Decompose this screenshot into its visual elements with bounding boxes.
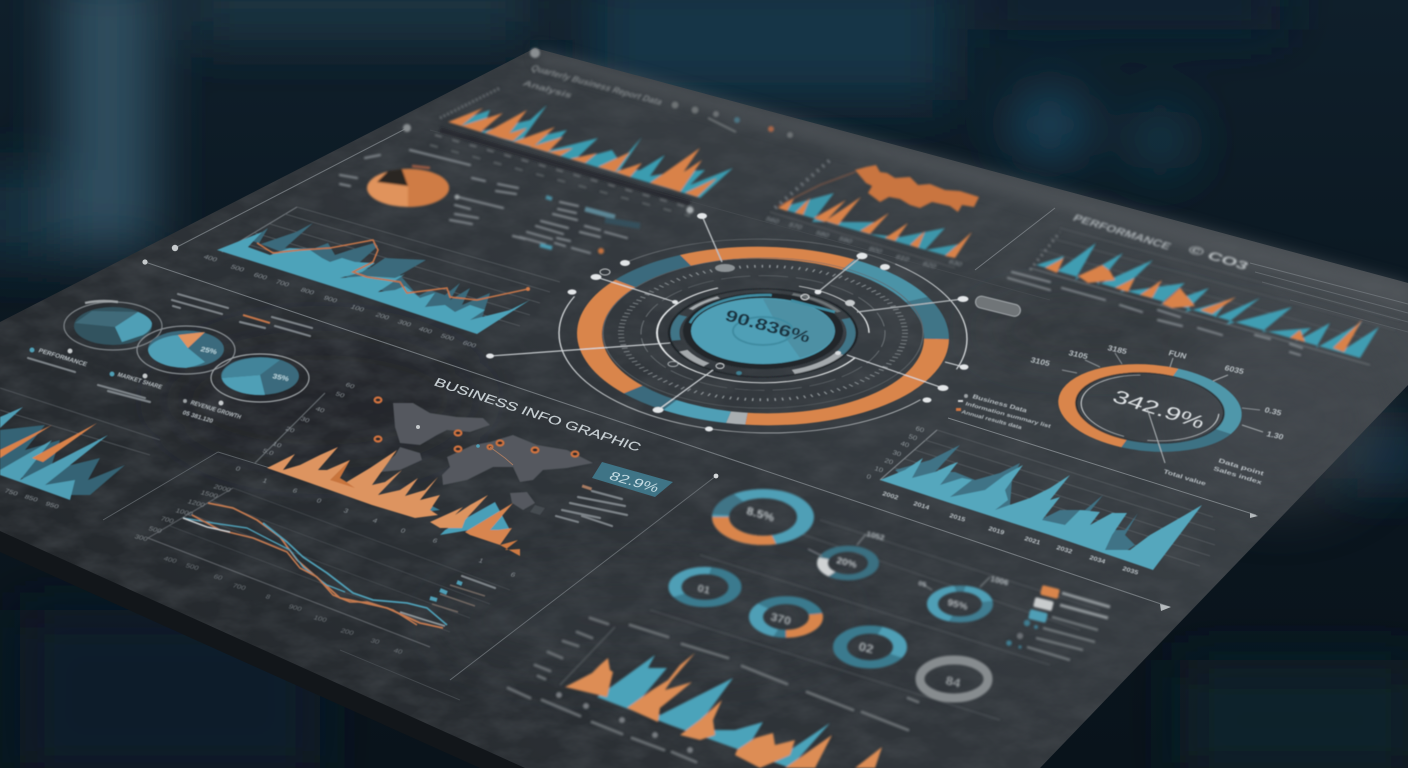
- area chart: orange: 10: [271, 441, 283, 449]
- area chart: right teal: 60: [914, 425, 925, 434]
- heading: top right chart: © CO3: [1185, 243, 1252, 272]
- pie legends: MARKET SHARE: [116, 372, 163, 391]
- panel header text: Quarterly Business Report Data: [528, 64, 664, 107]
- legend: bottom right: [1006, 585, 1110, 660]
- area chart: right teal: 2034: [1088, 555, 1106, 565]
- area chart: orange: 1: [261, 477, 269, 485]
- callouts: [1029, 344, 1285, 487]
- area chart: right teal: 2014: [912, 501, 930, 511]
- pill label: [974, 295, 1022, 318]
- legend: center right: [956, 394, 1052, 431]
- line chart: bottom left: 1000: [174, 507, 194, 518]
- pie 3: [211, 354, 309, 402]
- area chart: orange: 5.0: [261, 448, 275, 457]
- bar chart: far left: [0, 388, 165, 510]
- area chart: left with orange line: 400: [417, 326, 434, 335]
- donut 01: [675, 570, 735, 604]
- area chart: orange: 6: [509, 571, 517, 579]
- central radial gauge: [486, 213, 1022, 436]
- callouts: 3185: [1106, 344, 1129, 356]
- area chart: orange: 20: [284, 426, 296, 434]
- labels: left of pie: [340, 150, 470, 186]
- bar chart: top right with orange blob: 570: [787, 222, 804, 231]
- bar chart: top right with orange blob: 580: [814, 230, 831, 239]
- line chart: bottom left: 1500: [199, 489, 219, 500]
- line chart: bottom left: 500: [184, 562, 200, 572]
- legend: center right: Annual results data: [960, 410, 1023, 431]
- area chart: orange: 0: [315, 497, 323, 505]
- panel header text: Analysis: [520, 79, 574, 100]
- heading: top right chart: PERFORMANCE: [1070, 213, 1173, 252]
- ring: [1063, 362, 1237, 454]
- area chart: left with orange line: 700: [274, 279, 291, 288]
- area chart: left with orange line: 200: [374, 312, 391, 321]
- bar chart: top right with orange blob: 620: [921, 261, 938, 270]
- callouts: Total value: [1162, 469, 1207, 487]
- donut 01: 01: [696, 583, 711, 597]
- pie 2: [137, 326, 235, 374]
- callouts: 6035: [1223, 364, 1246, 376]
- area chart: left with orange line: [202, 207, 560, 349]
- bar chart: top right with orange blob: [764, 160, 979, 270]
- line chart: bottom left: 200: [339, 627, 355, 637]
- area chart: right teal: 20: [883, 457, 894, 466]
- area chart: right teal: 50: [907, 433, 918, 442]
- area chart: orange: 1: [477, 557, 485, 565]
- line chart: bottom left: 500: [147, 525, 163, 535]
- callouts: 0.35: [1263, 406, 1283, 417]
- connector lines and nodes: [486, 213, 968, 432]
- outer thin arcs: [557, 236, 969, 436]
- bar chart: bottom foreground: [508, 618, 918, 768]
- line chart: bottom left: 700: [231, 582, 247, 592]
- pie chart: orange: [367, 169, 449, 207]
- area chart: left with orange line: 900: [322, 295, 339, 304]
- centre disc: [683, 293, 843, 369]
- area chart: right teal: 30: [891, 449, 902, 458]
- area chart: right teal: 0: [865, 473, 872, 481]
- donut 370: [756, 600, 816, 634]
- donut 02: [840, 630, 900, 664]
- area chart: left with orange line: 600: [461, 340, 478, 349]
- area chart: orange: 6: [431, 537, 439, 545]
- area chart: orange: 3: [342, 507, 350, 515]
- kpi box: 82.9%: [606, 470, 662, 496]
- perspective divider lines: [103, 128, 1408, 700]
- pie 3: 35%: [271, 372, 291, 383]
- area chart: orange: [234, 382, 520, 579]
- area bars: top right: [1008, 228, 1400, 365]
- bar chart: far left: 950: [44, 501, 60, 510]
- donut 95%: 05: [918, 580, 927, 589]
- line chart: bottom left: 300: [133, 533, 149, 543]
- area chart: right teal: 2021: [1023, 536, 1041, 546]
- area chart: orange: 4: [371, 517, 379, 525]
- area chart: orange: 60: [344, 382, 356, 390]
- area chart: left with orange line: 400: [202, 254, 219, 263]
- notes above pies: [172, 294, 312, 336]
- area chart: orange: 0: [234, 465, 242, 473]
- inner rings and ticks: [603, 258, 923, 408]
- donut 95%: [918, 575, 1010, 619]
- heading: business infographic: BUSINESS INFO GRAPHIC: [431, 376, 643, 455]
- segmented ring: [588, 250, 938, 422]
- line chart: bottom left: 40: [392, 647, 404, 656]
- gauge value: 90.836%: [723, 306, 814, 346]
- text lists: center top: [450, 178, 640, 254]
- donut 8.5%: 8.5%: [745, 505, 776, 525]
- bar chart: top right with orange blob: 610: [894, 254, 911, 263]
- pie legends: PERFORMANCE: [37, 348, 88, 368]
- legend: center right: Business Data: [971, 394, 1028, 414]
- area chart: orange: 50: [334, 391, 346, 399]
- line chart: bottom left: [133, 483, 510, 656]
- line chart: bottom left: 900: [287, 603, 303, 613]
- donut 20%: 20%: [835, 556, 858, 571]
- donut 84: 84: [944, 673, 962, 690]
- area chart: right teal: 2032: [1055, 545, 1073, 555]
- bar chart: top right with orange blob: 630: [947, 259, 964, 268]
- callouts: Sales index: [1212, 466, 1263, 486]
- line chart: bottom left: 700: [159, 515, 175, 525]
- far section: top charts: [340, 48, 1400, 365]
- donut 84: [920, 660, 988, 698]
- panel header text: [403, 48, 793, 138]
- value: 342.9%: [1109, 387, 1209, 433]
- area chart: left with orange line: 100: [349, 304, 366, 313]
- callouts: 3105: [1029, 356, 1052, 368]
- area chart: left with orange line: 300: [396, 319, 413, 328]
- line chart: bottom left: 8: [264, 593, 272, 601]
- donut 8.5%: [720, 494, 806, 540]
- area chart: left with orange line: 600: [252, 272, 269, 281]
- kpi text block: [556, 485, 627, 526]
- donut 95%: 1006: [990, 575, 1010, 587]
- area chart: right teal: 10: [873, 465, 884, 474]
- bar chart: top right with orange blob: 600: [867, 246, 884, 255]
- area chart: orange: 0: [399, 527, 407, 535]
- donut 02: 02: [857, 639, 875, 656]
- area chart: right teal: 2019: [987, 526, 1005, 536]
- kpi box: [592, 462, 673, 497]
- panel: three pies: [28, 294, 312, 425]
- pie 2: 25%: [199, 345, 219, 356]
- area chart: right teal: 2035: [1121, 566, 1139, 576]
- area chart: left with orange line: 800: [299, 287, 316, 296]
- pie legends: [28, 348, 242, 425]
- area chart: right teal: [865, 425, 1215, 576]
- big gauge: right: [1029, 344, 1285, 487]
- bar chart: top right with orange blob: 590: [837, 236, 854, 245]
- area chart: right teal: 2015: [948, 513, 966, 523]
- callouts: 1.30: [1265, 430, 1285, 441]
- board side edge: [0, 525, 525, 768]
- bar chart: top right with orange blob: 560: [764, 216, 781, 225]
- line chart: bottom left: 100: [312, 614, 328, 624]
- callouts: FUN: [1167, 349, 1188, 361]
- area chart: right teal: 40: [899, 440, 910, 449]
- pie 1: [64, 301, 162, 350]
- line chart: bottom left: 60: [212, 573, 224, 582]
- world map with markers: [374, 397, 593, 515]
- area chart: left with orange line: 500: [439, 333, 456, 342]
- donut group: bottom right: [650, 494, 1110, 720]
- callouts: 3105: [1067, 349, 1090, 361]
- bar chart: far left: 850: [23, 494, 39, 503]
- area chart: orange: 40: [314, 406, 326, 414]
- donut 20%: [808, 530, 886, 577]
- bar chart: top orange and teal: [430, 105, 733, 216]
- donut 95%: 95%: [946, 598, 969, 613]
- area chart: right teal: 2002: [881, 491, 899, 501]
- heading: top right chart: [1070, 213, 1252, 272]
- bar chart: far left: 750: [3, 488, 19, 497]
- donut 370: 370: [769, 611, 793, 628]
- callouts: Data point: [1217, 458, 1266, 477]
- pie legends: REVENUE GROWTH: [189, 400, 242, 421]
- line chart: bottom left: 400: [162, 555, 178, 565]
- donut 20%: 1052: [866, 530, 886, 542]
- area chart: left with orange line: 500: [229, 264, 246, 273]
- line chart: bottom left: 1200: [186, 498, 206, 509]
- pie legends: 05 381.120: [181, 410, 214, 425]
- area chart: orange: 6: [291, 487, 299, 495]
- line chart: bottom left: 30: [369, 637, 381, 646]
- background stripes: [650, 520, 1100, 720]
- area chart: orange: 30: [299, 416, 311, 424]
- legend: center right: Information summary list: [964, 402, 1052, 430]
- line chart: bottom left: 2000: [212, 483, 232, 494]
